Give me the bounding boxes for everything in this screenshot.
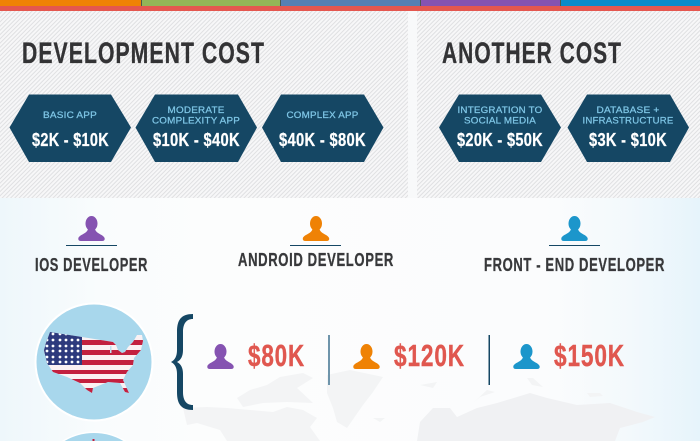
hexagon: complex app: COMPLEX APP: [286, 110, 358, 121]
icon: orange person: [303, 216, 329, 241]
icon: second country circle: [62, 432, 126, 441]
salary: Android: [353, 338, 465, 373]
developer: Android: [238, 216, 394, 270]
hexagon: integration to social media: $20K - $50K: [457, 130, 543, 150]
icon: USA flag map circle: [34, 302, 154, 422]
salary row: [207, 335, 625, 385]
hexagon: basic app: $2K - $10K: [32, 130, 109, 150]
hexagon: database + infrastructure: INFRASTRUCTURE: [582, 116, 674, 126]
salary: iOS: $80K: [248, 338, 305, 373]
hexagon: integration to social media: SOCIAL MEDIA: [464, 116, 536, 126]
top colour bar: [0, 0, 700, 11]
curly brace: [171, 314, 193, 410]
hexagon: complex app: [262, 94, 384, 162]
hexagon: database + infrastructure: $3K - $10K: [589, 130, 667, 150]
hexagon: basic app: BASIC APP: [43, 110, 97, 121]
icon: purple person: [78, 216, 105, 241]
icon: blue person: [561, 216, 588, 241]
hexagon: moderate complexity app: [136, 94, 257, 162]
salary: iOS: [207, 338, 305, 373]
hexagon: integration to social media: INTEGRATION TO: [458, 105, 542, 116]
panel: salaries background: [0, 198, 700, 441]
heading: development cost: DEVELOPMENT COST: [22, 37, 265, 70]
panel: development cost: [0, 11, 408, 198]
hexagon: moderate complexity app: $10K - $40K: [153, 130, 240, 150]
icon: purple person small: [207, 344, 234, 369]
salary: Android: $120K: [394, 338, 465, 373]
salary: front-end: [513, 338, 625, 373]
hexagon: integration to social media: [439, 94, 561, 162]
hexagon: database + infrastructure: DATABASE +: [596, 105, 660, 116]
icon: blue person small: [513, 344, 540, 369]
heading: another cost: ANOTHER COST: [442, 37, 622, 70]
developer: front-end: [484, 216, 665, 275]
panel: another cost: [417, 11, 700, 198]
developer: iOS: IOS DEVELOPER: [35, 254, 148, 275]
world map background: [183, 370, 655, 441]
salary: front-end: $150K: [554, 338, 625, 373]
icon: orange person small: [353, 344, 380, 369]
hexagon: complex app: $40K - $80K: [279, 130, 366, 150]
developer: Android: ANDROID DEVELOPER: [238, 249, 394, 270]
hexagon: moderate complexity app: COMPLEXITY APP: [152, 116, 240, 126]
USA map with flag: [44, 332, 143, 393]
developer: iOS: [35, 216, 148, 275]
hexagon: basic app: [10, 94, 131, 162]
hexagon: moderate complexity app: MODERATE: [168, 105, 224, 116]
hexagon: database + infrastructure: [568, 94, 689, 162]
